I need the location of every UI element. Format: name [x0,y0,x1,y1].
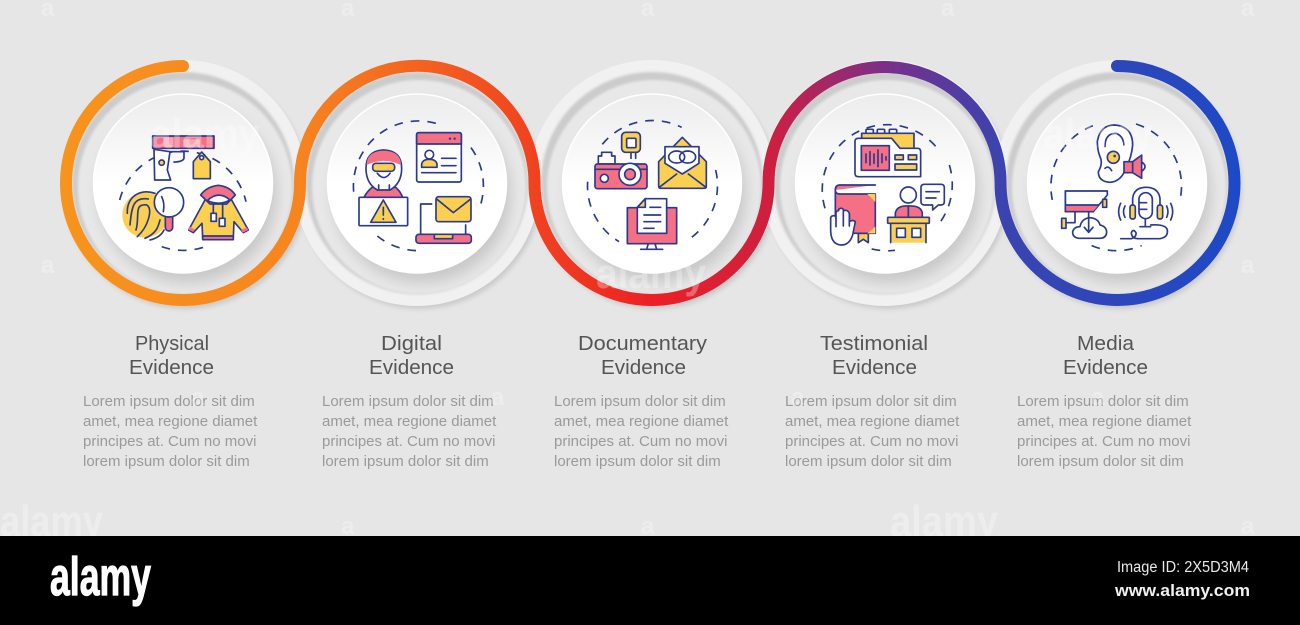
body text: testimonial: Lorem ipsum dolor sit dim [785,393,957,410]
body text: digital: amet, mea regione diamet [322,413,497,430]
title: media evidence: Evidence [1063,356,1148,379]
body text: physical: lorem ipsum dolor sit dim [83,453,250,470]
gradient ribbon connecting circles [66,66,1235,300]
body text: digital: Lorem ipsum dolor sit dim [322,393,494,410]
watermarks: a [641,513,655,540]
watermarks: alamy [150,110,261,157]
watermarks: alamy [596,250,707,297]
watermarks: alamy [890,497,998,546]
body text: digital: lorem ipsum dolor sit dim [322,453,489,470]
title: media evidence [1063,332,1148,379]
website: www.alamy.com [1114,582,1250,600]
body text: media: amet, mea regione diamet [1017,413,1192,430]
body text: physical: principes at. Cum no movi [83,433,256,450]
panel: physical evidence [60,60,308,470]
body text: media: Lorem ipsum dolor sit dim [1017,393,1189,410]
body text: documentary: amet, mea regione diamet [554,413,729,430]
title: testimonial evidence: Testimonial [820,332,928,355]
body text: testimonial: lorem ipsum dolor sit dim [785,453,952,470]
body text: documentary: Lorem ipsum dolor sit dim [554,393,726,410]
title: testimonial evidence [820,332,928,379]
title: physical evidence [129,332,214,379]
ring and disc: documentary [529,60,777,309]
footer bar [0,536,1300,625]
body text: digital: principes at. Cum no movi [322,433,495,450]
watermarks: alamy [1043,110,1154,157]
body text: physical: Lorem ipsum dolor sit dim [83,393,255,410]
body text: testimonial: amet, mea regione diamet [785,413,960,430]
footer logo: alamy [50,547,151,607]
panel: digital evidence [294,60,542,470]
watermarks: a [491,384,505,411]
panel: documentary evidence [529,60,777,470]
title: physical evidence: Physical [135,332,209,355]
title: testimonial evidence: Evidence [832,356,917,379]
title: physical evidence: Evidence [129,356,214,379]
title: documentary evidence: Documentary [578,332,708,355]
watermarks: a [1241,513,1255,540]
title: documentary evidence [578,332,708,379]
icon: gun, tag, fingerprint, hoodie [120,136,248,250]
body text: media: principes at. Cum no movi [1017,433,1190,450]
title: digital evidence: Digital [381,332,442,355]
icon: camera, email, document on monitor [588,120,718,249]
watermarks: a [341,513,355,540]
watermarks: a [41,252,55,279]
body text: media: lorem ipsum dolor sit dim [1017,453,1184,470]
body text: documentary: principes at. Cum no movi [554,433,727,450]
body text: documentary: lorem ipsum dolor sit dim [554,453,721,470]
ring and disc: digital [294,60,542,309]
watermarks: a [1241,252,1255,279]
icon: recording folder, oath book, witness [822,125,952,251]
title: digital evidence [369,332,454,379]
panel: testimonial evidence [762,60,1010,470]
watermarks: a [191,384,205,411]
panel: media evidence [994,60,1242,470]
title: digital evidence: Evidence [369,356,454,379]
ring and disc: testimonial [762,60,1010,309]
watermarks: a [791,384,805,411]
title: documentary evidence: Evidence [601,356,686,379]
image id: Image ID: 2X5D3M4 [1117,559,1249,576]
ring and disc: physical [60,60,308,309]
body text: testimonial: principes at. Cum no movi [785,433,958,450]
watermarks: alamy [0,497,103,546]
title: media evidence: Media [1077,332,1135,355]
body text: physical: amet, mea regione diamet [83,413,258,430]
ring and disc: media [994,60,1242,309]
watermarks: a [1091,384,1105,411]
icon: hacker, profile window, laptop email [353,121,483,251]
icon: ear, speaker, cctv camera, microphone [1051,124,1182,251]
